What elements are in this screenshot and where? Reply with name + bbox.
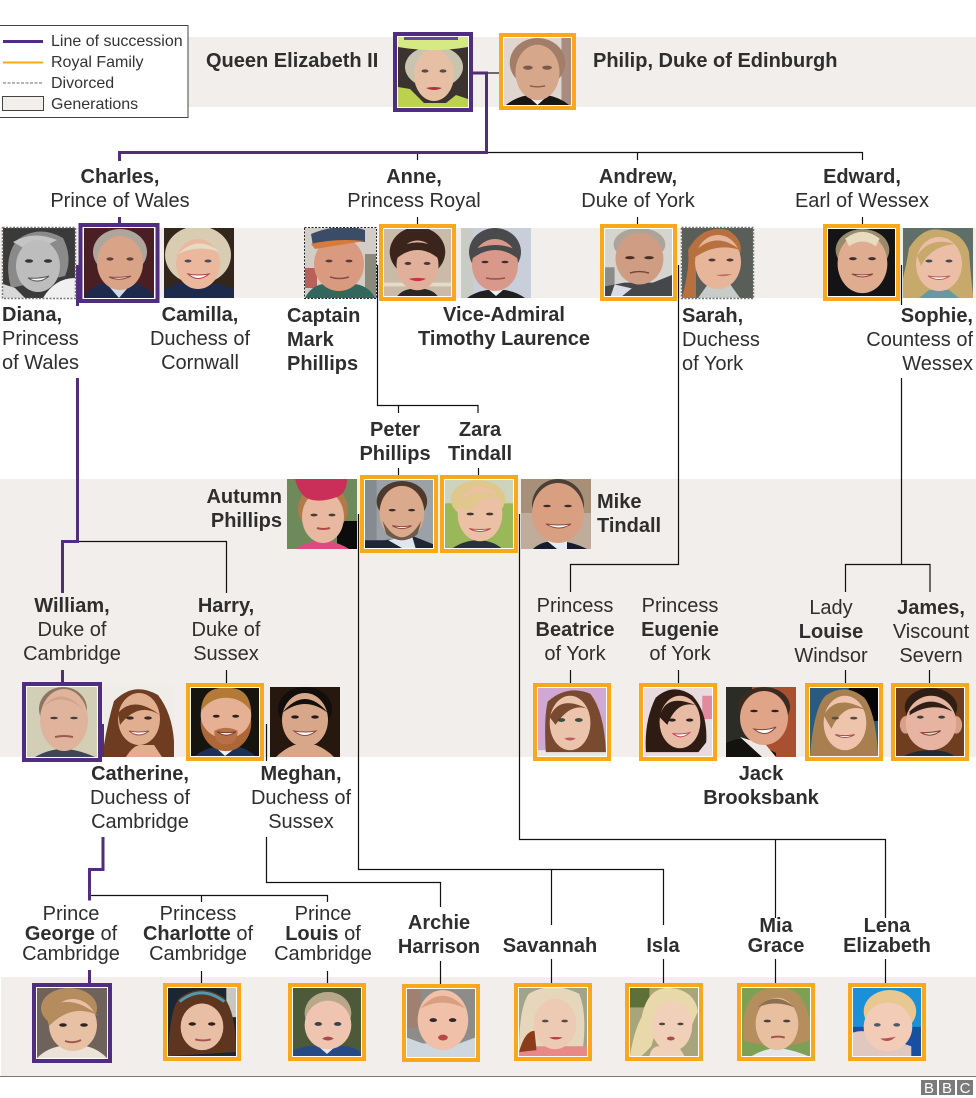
name: Mike Tindall: Mike — [597, 491, 641, 513]
name: Prince Louis: Cambridge — [274, 943, 372, 965]
photo: Princess Charlotte — [165, 985, 239, 1059]
photo: Sophie — [903, 228, 973, 298]
name: Prince George: George of — [25, 923, 117, 945]
connector lines: royal family — [77, 73, 930, 984]
name: Mike Tindall: Tindall — [597, 515, 661, 537]
connector lines: line of succession — [62, 73, 486, 984]
name: Harry: Sussex — [193, 643, 259, 665]
photo: Vice-Admiral Timothy Laurence — [461, 228, 531, 298]
name: Meghan: Meghan, — [260, 763, 342, 785]
name: Sarah: Sarah, — [682, 305, 743, 327]
name: Peter Phillips: Peter — [370, 419, 420, 441]
name: Prince Louis: Louis of — [285, 923, 361, 945]
photo: Prince George — [34, 985, 110, 1061]
name: Queen Elizabeth II: Queen Elizabeth II — [206, 50, 378, 72]
name: James, Viscount Severn: James, — [897, 597, 965, 619]
name: Sophie: Sophie, — [901, 305, 973, 327]
name: Edward: Earl of Wessex — [795, 190, 929, 212]
name: Sarah: of York — [682, 353, 744, 375]
photo: Catherine — [104, 689, 174, 757]
name: Anne: Anne, — [386, 166, 442, 188]
name: Lady Louise Windsor: Louise — [799, 621, 863, 643]
name: Prince George: Cambridge — [22, 943, 120, 965]
photo: Louise — [807, 685, 881, 759]
name: Zara Tindall: Tindall — [448, 443, 512, 465]
name: Peter Phillips: Phillips — [359, 443, 431, 465]
photo: Autumn Phillips — [287, 479, 357, 549]
name: Edward: Edward, — [823, 166, 901, 188]
name: Savannah: Savannah — [503, 935, 597, 957]
name: Captain Mark Phillips: Mark — [287, 329, 335, 351]
photo: Sarah — [682, 228, 754, 298]
name: Eugenie: Princess — [642, 595, 718, 617]
photo: Mike Tindall — [521, 479, 591, 549]
photo: Lena Elizabeth — [850, 985, 924, 1059]
name: Catherine: Cambridge — [91, 811, 189, 833]
photo: Diana — [2, 228, 76, 298]
photo: Camilla — [164, 228, 234, 298]
BBC logo: B — [942, 1080, 952, 1097]
name: James, Viscount Severn: Severn — [899, 645, 963, 667]
name: Isla: Isla — [646, 935, 681, 957]
generation band: great-grandchildren of the Queen — [1, 977, 976, 1076]
name: Prince George: Prince — [43, 903, 99, 925]
name: Andrew: Duke of York — [581, 190, 696, 212]
name: Jack Brooksbank: Brooksbank — [703, 787, 820, 809]
name: Meghan: Sussex — [268, 811, 334, 833]
photo: Eugenie — [641, 685, 715, 759]
legend — [0, 26, 188, 118]
legend: royal family: Royal Family — [51, 54, 143, 71]
name: Sophie: Wessex — [902, 353, 973, 375]
name: Anne: Princess Royal — [347, 190, 481, 212]
name: Princess Charlotte: Cambridge — [149, 943, 247, 965]
name: Mia Grace: Grace — [748, 935, 804, 957]
name: Mia Grace: Mia — [759, 915, 794, 937]
name: Archie Harrison: Harrison — [398, 936, 480, 958]
name: Prince Louis: Prince — [295, 903, 351, 925]
photo: Archie Harrison — [404, 986, 478, 1060]
name: Zara Tindall: Zara — [459, 419, 502, 441]
name: Sarah: Duchess — [682, 329, 760, 351]
photo: Andrew — [602, 226, 675, 299]
name: Camilla: Camilla, — [162, 304, 238, 326]
name: Harry: Harry, — [198, 595, 254, 617]
name: Beatrice: Princess — [537, 595, 613, 617]
name: Captain Mark Phillips: Captain — [287, 305, 360, 327]
legend: line of succession: Line of succession — [51, 33, 183, 50]
name: Philip, Duke of Edinburgh: Philip, Duke of Edinburgh — [593, 50, 837, 72]
name: Eugenie: of York — [649, 643, 712, 665]
photo: Edward — [825, 226, 898, 299]
photo: William — [24, 684, 100, 760]
name: Autumn Phillips: Autumn — [206, 486, 282, 508]
name: Sophie: Countess of — [866, 329, 973, 351]
photo: Captain Mark Phillips — [304, 227, 376, 298]
name: Eugenie: Eugenie — [641, 619, 719, 641]
name: Lady Louise Windsor: Lady — [809, 597, 853, 619]
generation band: Queen Elizabeth II and Philip — [188, 37, 976, 107]
photo: Beatrice — [535, 685, 609, 759]
photo: Prince Louis — [290, 985, 364, 1059]
name: William: Duke of — [38, 619, 107, 641]
photo: Philip — [501, 35, 574, 108]
photo: Charles — [80, 225, 158, 301]
name: Lady Louise Windsor: Windsor — [794, 645, 868, 667]
generation band: grandchildren of the Queen — [0, 479, 976, 757]
photo: Isla — [627, 985, 701, 1059]
name: Beatrice: of York — [544, 643, 607, 665]
legend: generations — [2, 96, 138, 113]
BBC logo: B — [924, 1080, 934, 1097]
name: Catherine: Duchess of — [90, 787, 190, 809]
legend: divorced — [3, 75, 114, 92]
generation band: children of the Queen — [0, 228, 976, 298]
name: Autumn Phillips: Phillips — [211, 510, 282, 532]
name: Diana: Diana, — [2, 304, 62, 326]
name: Andrew: Andrew, — [599, 166, 677, 188]
name: Vice-Admiral Timothy Laurence: Vice-Admiral — [443, 304, 565, 326]
photo: Anne — [381, 226, 454, 299]
name: Jack Brooksbank: Jack — [739, 763, 784, 785]
name: Princess Charlotte: Charlotte of — [143, 923, 253, 945]
BBC logo: C — [960, 1080, 971, 1097]
name: William: Cambridge — [23, 643, 121, 665]
photo: Zara Tindall — [442, 477, 516, 551]
footer rule — [0, 1076, 976, 1077]
photo: James — [893, 685, 967, 759]
legend: divorced: Divorced — [51, 75, 114, 92]
name: Archie Harrison: Archie — [408, 912, 470, 934]
photo: Mia Grace — [739, 985, 813, 1059]
legend: generations: Generations — [51, 96, 138, 113]
name: Lena Elizabeth: Lena — [864, 915, 911, 937]
name: Diana: of Wales — [2, 352, 79, 374]
photo: Meghan — [270, 687, 340, 757]
name: James, Viscount Severn: Viscount — [893, 621, 970, 643]
name: Princess Charlotte: Princess — [160, 903, 236, 925]
photo: Jack Brooksbank — [726, 687, 796, 757]
name: Charles: Charles, — [81, 166, 159, 188]
name: Camilla: Duchess of — [150, 328, 250, 350]
name: Vice-Admiral Timothy Laurence: Timothy Laurence — [418, 328, 590, 350]
name: William: William, — [34, 595, 110, 617]
photo: Savannah — [516, 985, 590, 1059]
name: Harry: Duke of — [192, 619, 261, 641]
name: Diana: Princess — [2, 328, 79, 350]
name: Catherine: Catherine, — [91, 763, 189, 785]
name: Camilla: Cornwall — [161, 352, 239, 374]
photo: Harry — [188, 685, 262, 759]
name: Charles: Prince of Wales — [50, 190, 190, 212]
name: Lena Elizabeth: Elizabeth — [843, 935, 931, 957]
name: Meghan: Duchess of — [251, 787, 351, 809]
photo: Queen Elizabeth II — [395, 34, 471, 110]
BBC logo — [921, 1080, 973, 1097]
name: Captain Mark Phillips: Phillips — [287, 353, 358, 375]
photo: Peter Phillips — [362, 477, 436, 551]
name: Beatrice: Beatrice — [536, 619, 614, 641]
